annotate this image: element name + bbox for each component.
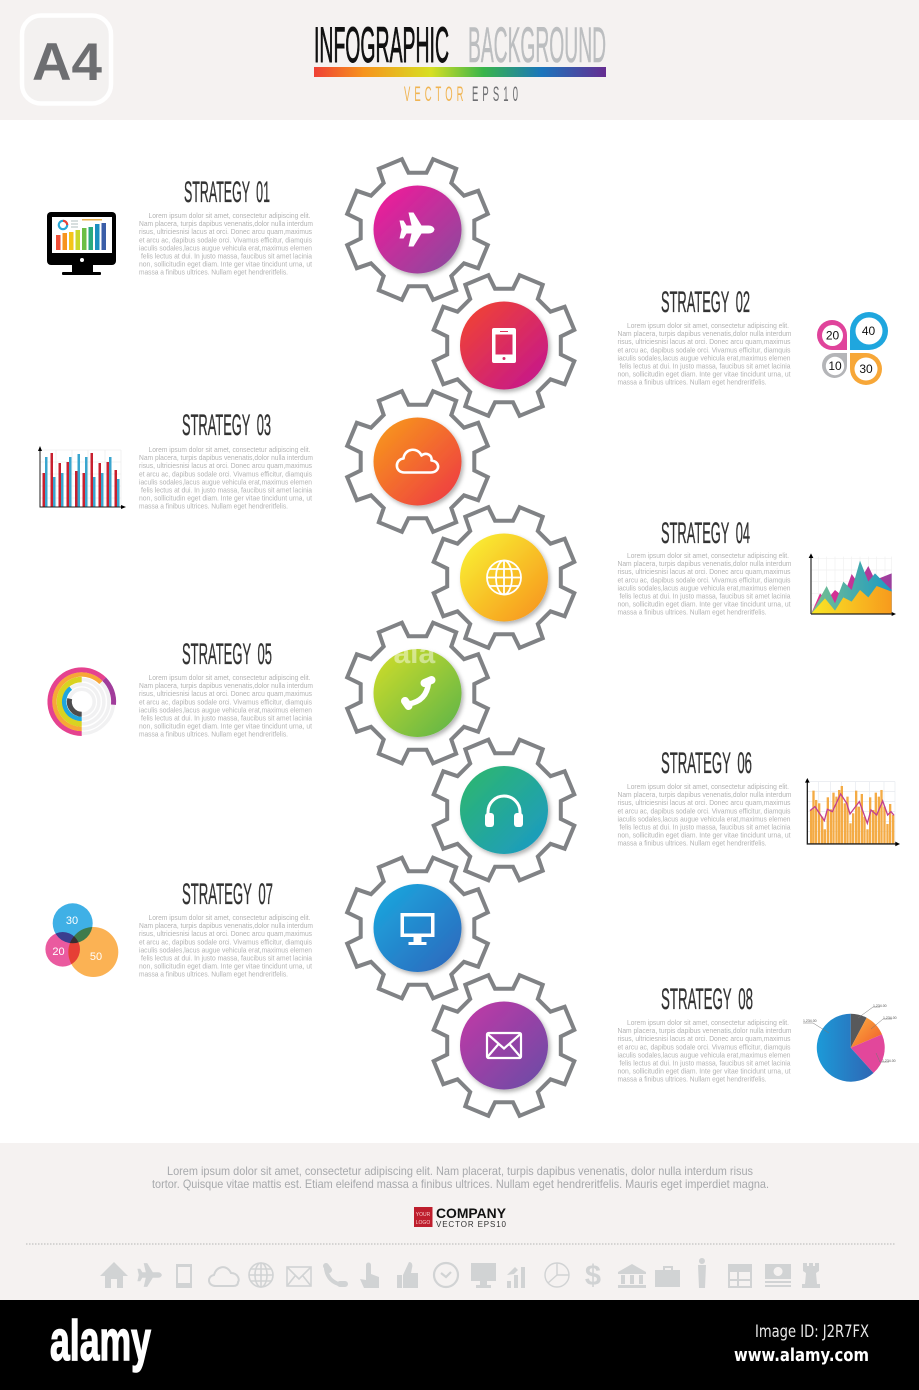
strategy 06 text: Nam placera, turpis dapibus venenatis,dolor nulla interdum — [618, 790, 792, 799]
strategy 04 text: risus, ultriciesnisi lacus at orci. Donec arcu quam,maximus — [618, 567, 791, 576]
icon: pointing hand — [360, 1262, 379, 1288]
icon: clock — [434, 1263, 458, 1287]
company logo: VECTOR EPS10 — [436, 1220, 507, 1229]
strategy 02 text — [618, 286, 792, 387]
gear 5: telephone — [347, 623, 488, 763]
chart: pie: 1,234.00 — [883, 1016, 897, 1020]
icon: smartphone — [176, 1264, 192, 1288]
strategy 02 text: risus, ultriciesnisi lacus at orci. Donec arcu quam,maximus — [618, 337, 791, 346]
footer text — [152, 1164, 769, 1191]
strategy 07 text: risus, ultriciesnisi lacus at orci. Donec arcu quam,maximus — [139, 929, 312, 938]
strategy 01 text: massa a finibus ultrices. Nullam eget hendreritfelis. — [139, 268, 288, 277]
gear 6: headphones — [434, 740, 574, 880]
strategy 06 text: felis lectus at dui. In justo massa, faucibus sit amet lacinia — [620, 822, 791, 832]
footer band — [0, 1143, 919, 1300]
chart: pie: 1,234.00 — [882, 1059, 896, 1063]
strategy 08 text: STRATEGY 08 — [661, 983, 753, 1016]
chart: quarter droplets 20 40 10 30 — [817, 312, 888, 385]
strategy 07 text: Nam placera, turpis dapibus venenatis,dolor nulla interdum — [139, 921, 313, 930]
chart: venn circles: 20 — [52, 946, 65, 958]
strategy 01 text: STRATEGY 01 — [184, 176, 270, 209]
icon: envelope — [287, 1267, 311, 1286]
header band: BACKGROUND — [468, 17, 606, 73]
chart: red and blue bars — [38, 446, 126, 509]
strategy 08 text: et arcu ac, dapibus sodale orci. Vivamus efficitur, diamquis — [618, 1042, 791, 1051]
strategy 04 text: felis lectus at dui. In justo massa, faucibus sit amet lacinia — [620, 592, 791, 600]
strategy 01 text: risus, ultriciesnisi lacus at orci. Donec arcu quam,maximus — [139, 227, 312, 236]
strategy 08 text: Nam placera, turpis dapibus venenatis,dolor nulla interdum — [618, 1026, 792, 1035]
chart: venn circles — [45, 903, 118, 977]
strategy 01 text: Lorem ipsum dolor sit amet, consectetur adipiscing elit. — [148, 211, 310, 220]
strategy 03 text: massa a finibus ultrices. Nullam eget hendreritfelis. — [139, 502, 288, 511]
icon: briefcase — [655, 1266, 680, 1287]
gear 1: plane — [347, 159, 488, 300]
strategy 07 text: felis lectus at dui. In justo massa, faucibus sit amet lacinia — [141, 954, 312, 962]
subtitle: EPS10 — [472, 83, 522, 106]
icon: calculator — [728, 1264, 752, 1288]
strategy 08 text: massa a finibus ultrices. Nullam eget hendreritfelis. — [618, 1075, 766, 1084]
strategy 05 text: Nam placera, turpis dapibus venenatis,dolor nulla interdum — [139, 681, 313, 690]
header band — [0, 0, 919, 120]
strategy 05 text: iaculis sodales,lacus augue vehicula erat,maximus elemen — [139, 705, 312, 714]
gear 8: envelope — [434, 975, 574, 1116]
subtitle — [404, 83, 522, 106]
strategy 08 text: non, sollicitudin eget diam. Inte ger vitae tincidunt urna, ut — [618, 1067, 791, 1076]
strategy 06 text: et arcu ac, dapibus sodale orci. Vivamus efficitur, diamquis — [618, 806, 791, 815]
title: INFOGRAPHIC — [314, 17, 449, 73]
strategy 06 text: risus, ultriciesnisi lacus at orci. Donec arcu quam,maximus — [618, 798, 791, 807]
strategy 07 text — [139, 878, 313, 979]
chart: quarter droplets 20 40 10 30: 10 — [828, 359, 842, 373]
strategy 06 text: non, sollicitudin eget diam. Inte ger vitae tincidunt urna, ut — [618, 831, 791, 840]
strategy 03 text: risus, ultriciesnisi lacus at orci. Donec arcu quam,maximus — [139, 461, 312, 470]
strategy 04 text: Nam placera, turpis dapibus venenatis,dolor nulla interdum — [618, 559, 792, 568]
strategy 02 text: STRATEGY 02 — [661, 286, 750, 319]
chart: quarter droplets 20 40 10 30: 40 — [862, 324, 875, 338]
strategy 03 text — [139, 409, 313, 511]
icon: rook — [802, 1263, 820, 1288]
A4 badge: A4 — [32, 33, 103, 92]
strategy 05 text: STRATEGY 05 — [182, 638, 272, 671]
company logo: COMPANY — [436, 1205, 507, 1221]
strategy 08 text: felis lectus at dui. In justo massa, faucibus sit amet lacinia — [620, 1058, 791, 1068]
icon: person — [698, 1258, 706, 1288]
chart: venn circles: 50 — [90, 951, 102, 963]
icon: dollar: $ — [585, 1260, 601, 1292]
strategy 08 text — [618, 983, 792, 1084]
icon: monitor with bar chart — [47, 212, 116, 275]
footer text: tortor. Quisque vitae mattis est. Etiam eleifend massa a finibus ultrices. Nullam eget hendreritfelis. Mauris eget imperdiet magna. — [152, 1177, 769, 1191]
strategy 04 text — [618, 517, 792, 617]
strategy 05 text: risus, ultriciesnisi lacus at orci. Donec arcu quam,maximus — [139, 689, 312, 698]
strategy 02 text: Lorem ipsum dolor sit amet, consectetur adipiscing elit. — [627, 321, 789, 330]
strategy 03 text: et arcu ac, dapibus sodale orci. Vivamus efficitur, diamquis — [139, 469, 312, 478]
strategy 03 text: Lorem ipsum dolor sit amet, consectetur adipiscing elit. — [148, 445, 310, 454]
strategy 07 text: iaculis sodales,lacus augue vehicula erat,maximus elemen — [139, 945, 312, 954]
strategy 06 text: massa a finibus ultrices. Nullam eget hendreritfelis. — [618, 839, 766, 848]
strategy 06 text: STRATEGY 06 — [661, 747, 752, 780]
icon: bank — [618, 1264, 646, 1288]
company logo — [414, 1205, 507, 1229]
strategy 04 text: massa a finibus ultrices. Nullam eget hendreritfelis. — [618, 608, 766, 617]
strategy 05 text: felis lectus at dui. In justo massa, faucibus sit amet lacinia — [141, 714, 312, 722]
strategy 02 text: felis lectus at dui. In justo massa, faucibus sit amet lacinia — [620, 362, 791, 370]
icon: cloud — [209, 1267, 239, 1286]
icon: thumbs up — [397, 1262, 418, 1288]
strategy 08 text: iaculis sodales,lacus augue vehicula erat,maximus elemen — [618, 1050, 790, 1059]
icon: telephone — [326, 1266, 345, 1285]
strategy 01 text — [139, 176, 313, 277]
chart: venn circles: 30 — [66, 915, 78, 927]
strategy 05 text: non, sollicitudin eget diam. Inte ger vitae tincidunt urna, ut — [139, 722, 312, 731]
strategy 01 text: non, sollicitudin eget diam. Inte ger vitae tincidunt urna, ut — [139, 260, 312, 269]
chart: pie: 1,234.00 — [803, 1019, 817, 1023]
strategy 01 text: et arcu ac, dapibus sodale orci. Vivamus efficitur, diamquis — [139, 235, 312, 244]
strategy 05 text: Lorem ipsum dolor sit amet, consectetur adipiscing elit. — [148, 673, 310, 682]
gear 4: globe — [434, 507, 574, 648]
strategy 07 text: Lorem ipsum dolor sit amet, consectetur adipiscing elit. — [148, 913, 310, 922]
chart: pie — [803, 1004, 897, 1082]
footer text: Lorem ipsum dolor sit amet, consectetur adipiscing elit. Nam placerat, turpis dapibus venenatis, dolor nulla interdum risus — [167, 1164, 753, 1178]
strategy 01 text: Nam placera, turpis dapibus venenatis,dolor nulla interdum — [139, 219, 313, 228]
strategy 06 text: Lorem ipsum dolor sit amet, consectetur adipiscing elit. — [627, 782, 789, 791]
company logo: YOUR — [416, 1212, 431, 1218]
chart: area peaks — [809, 553, 896, 616]
strategy 03 text: felis lectus at dui. In justo massa, faucibus sit amet lacinia — [141, 486, 312, 494]
strategy 04 text: non, sollicitudin eget diam. Inte ger vitae tincidunt urna, ut — [618, 600, 791, 609]
gear 7: monitor — [347, 858, 488, 998]
icon: pie — [545, 1263, 569, 1287]
strategy 07 text: massa a finibus ultrices. Nullam eget hendreritfelis. — [139, 970, 288, 979]
strategy 01 text: felis lectus at dui. In justo massa, faucibus sit amet lacinia — [141, 252, 312, 260]
gear 3: cloud — [347, 391, 488, 532]
rainbow bar — [314, 67, 606, 77]
gear 5: telephone: ala — [394, 637, 436, 670]
website: www.alamy.com — [734, 1345, 869, 1366]
chart: pie: 1,234.00 — [873, 1004, 887, 1008]
strategy 01 text: iaculis sodales,lacus augue vehicula erat,maximus elemen — [139, 243, 312, 252]
subtitle: VECTOR — [404, 83, 467, 106]
alamy logo: alamy — [50, 1309, 151, 1373]
strategy 08 text: risus, ultriciesnisi lacus at orci. Donec arcu quam,maximus — [618, 1034, 791, 1043]
chart: orange bars with line — [805, 778, 900, 846]
black credit bar — [0, 1300, 919, 1390]
strategy 02 text: massa a finibus ultrices. Nullam eget hendreritfelis. — [618, 378, 766, 387]
strategy 05 text: massa a finibus ultrices. Nullam eget hendreritfelis. — [139, 730, 288, 739]
strategy 03 text: STRATEGY 03 — [182, 409, 271, 442]
strategy 02 text: non, sollicitudin eget diam. Inte ger vitae tincidunt urna, ut — [618, 370, 791, 379]
strategy 07 text: non, sollicitudin eget diam. Inte ger vitae tincidunt urna, ut — [139, 962, 312, 971]
strategy 05 text — [139, 638, 313, 739]
icon: globe — [249, 1263, 273, 1287]
icon: newspaper — [765, 1264, 791, 1287]
footer icon row — [100, 1258, 820, 1292]
strategy 03 text: non, sollicitudin eget diam. Inte ger vitae tincidunt urna, ut — [139, 494, 312, 503]
strategy 04 text: Lorem ipsum dolor sit amet, consectetur adipiscing elit. — [627, 551, 789, 560]
chart: quarter droplets 20 40 10 30: 30 — [859, 362, 873, 376]
strategy 04 text: et arcu ac, dapibus sodale orci. Vivamus efficitur, diamquis — [618, 575, 791, 584]
icon: monitor — [471, 1263, 496, 1288]
strategy 02 text: et arcu ac, dapibus sodale orci. Vivamus efficitur, diamquis — [618, 345, 791, 354]
icon: plane — [137, 1263, 162, 1287]
strategy 04 text: STRATEGY 04 — [661, 517, 750, 550]
strategy 07 text: STRATEGY 07 — [182, 878, 273, 911]
strategy 08 text: Lorem ipsum dolor sit amet, consectetur adipiscing elit. — [627, 1018, 789, 1027]
strategy 05 text: et arcu ac, dapibus sodale orci. Vivamus efficitur, diamquis — [139, 697, 312, 706]
A4 badge — [22, 16, 111, 104]
strategy 03 text: iaculis sodales,lacus augue vehicula erat,maximus elemen — [139, 477, 312, 486]
strategy 02 text: Nam placera, turpis dapibus venenatis,dolor nulla interdum — [618, 329, 792, 338]
gear 2: smartphone — [434, 275, 574, 416]
icon: home — [100, 1262, 128, 1288]
chart: quarter droplets 20 40 10 30: 20 — [826, 328, 839, 342]
chart: concentric rings — [50, 670, 114, 734]
strategy 02 text: iaculis sodales,lacus augue vehicula erat,maximus elemen — [618, 353, 790, 362]
strategy 04 text: iaculis sodales,lacus augue vehicula erat,maximus elemen — [618, 583, 790, 592]
strategy 06 text: iaculis sodales,lacus augue vehicula erat,maximus elemen — [618, 814, 790, 823]
image id: Image ID: J2R7FX — [755, 1322, 869, 1342]
strategy 06 text — [618, 747, 792, 848]
strategy 03 text: Nam placera, turpis dapibus venenatis,dolor nulla interdum — [139, 453, 313, 462]
company logo: LOGO — [416, 1220, 430, 1226]
strategy 07 text: et arcu ac, dapibus sodale orci. Vivamus efficitur, diamquis — [139, 937, 312, 946]
icon: bar chart — [507, 1267, 525, 1288]
